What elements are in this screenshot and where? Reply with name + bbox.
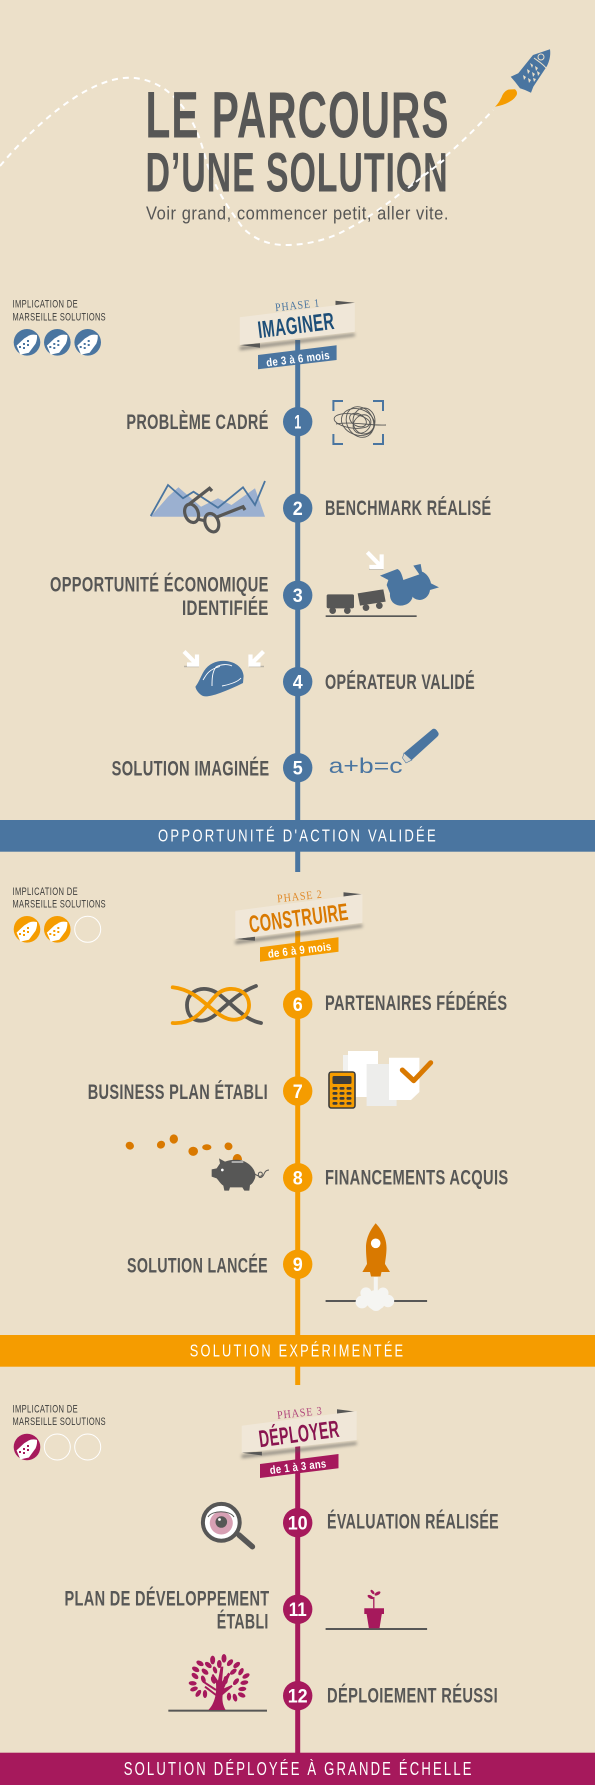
- step 12: DÉPLOIEMENT RÉUSSI: [327, 1683, 498, 1708]
- step 2: [151, 481, 491, 534]
- step 1: [126, 401, 386, 444]
- step 7: 7: [293, 1081, 303, 1103]
- icon: chart and glasses: [151, 481, 265, 534]
- banner 3: DÉPLOYER: [257, 1415, 341, 1453]
- milestone bar 1: OPPORTUNITÉ D'ACTION VALIDÉE: [158, 826, 438, 846]
- step 9: [127, 1223, 427, 1311]
- implication block 3: [12, 1403, 106, 1460]
- step 8: [124, 1134, 509, 1192]
- banner 2: CONSTRUIRE: [247, 899, 350, 939]
- title: [146, 77, 450, 204]
- icon: pen and formula: [329, 729, 439, 778]
- icon: header rocket: [495, 49, 550, 107]
- step 3: OPPORTUNITÉ ÉCONOMIQUE: [50, 572, 269, 597]
- banner 1: [240, 298, 355, 370]
- step 2: BENCHMARK RÉALISÉ: [325, 495, 492, 520]
- step 5: [112, 729, 439, 782]
- step 2: 2: [293, 498, 303, 520]
- step 5: 5: [293, 758, 303, 780]
- implication block 1: [12, 299, 106, 356]
- banner 3: [242, 1405, 357, 1478]
- step 12: [168, 1654, 498, 1712]
- step 11: [64, 1585, 427, 1634]
- icon: tangled scribble in frame: [333, 401, 386, 444]
- banner 3: PHASE 3: [277, 1405, 323, 1422]
- step 11: PLAN DE DÉVELOPPEMENT: [64, 1585, 270, 1610]
- step 3: 3: [293, 585, 303, 607]
- timeline 2: [295, 930, 300, 1385]
- banner 2: [235, 889, 362, 962]
- step 11: 11: [289, 1599, 307, 1621]
- milestone bar 3: [0, 1753, 595, 1785]
- dashed flight path: [0, 78, 493, 245]
- step 7: BUSINESS PLAN ÉTABLI: [88, 1079, 268, 1104]
- panel: phase 2 construire: [0, 886, 595, 1385]
- step 6: 6: [293, 994, 303, 1016]
- icon: piggy bank and coins: [124, 1134, 269, 1191]
- implication block 2: MARSEILLE SOLUTIONS: [12, 899, 106, 911]
- icon: pen and formula: a+b=c: [329, 755, 403, 778]
- step 3: IDENTIFIÉE: [182, 595, 269, 620]
- implication block 2: IMPLICATION DE: [12, 886, 78, 898]
- dashed path over title: [408, 160, 444, 188]
- implication block 1: IMPLICATION DE: [12, 299, 78, 311]
- panel: phase 3 deployer: [0, 1403, 595, 1785]
- step 9: 9: [293, 1254, 303, 1276]
- step 5: SOLUTION IMAGINÉE: [112, 755, 269, 780]
- subtitle: Voir grand, commencer petit, aller vite.: [146, 202, 449, 223]
- milestone bar 2: SOLUTION EXPÉRIMENTÉE: [190, 1341, 405, 1361]
- step 12: 12: [288, 1686, 308, 1708]
- step 4: 4: [293, 672, 303, 694]
- step 9: SOLUTION LANCÉE: [127, 1252, 268, 1277]
- icon: tree: [168, 1654, 267, 1712]
- implication block 2: [12, 886, 106, 943]
- banner 2: PHASE 2: [277, 889, 323, 905]
- step 1: 1: [294, 412, 301, 434]
- step 7: [88, 1051, 431, 1108]
- banner 3: de 1 à 3 ans: [269, 1458, 327, 1477]
- step 4: OPÉRATEUR VALIDÉ: [325, 669, 475, 694]
- step 10: ÉVALUATION RÉALISÉE: [327, 1509, 499, 1534]
- step 3: [50, 552, 439, 620]
- step 6: PARTENAIRES FÉDÉRÉS: [325, 990, 507, 1015]
- icon: seedling in pot: [326, 1589, 427, 1630]
- banner 1: IMAGINER: [256, 308, 336, 344]
- step 10: [203, 1504, 499, 1547]
- timeline 3: [295, 1445, 300, 1755]
- implication block 3: IMPLICATION DE: [12, 1403, 78, 1415]
- step 8: 8: [293, 1168, 303, 1190]
- step 10: 10: [288, 1512, 308, 1534]
- step 4: [184, 652, 475, 696]
- implication block 1: MARSEILLE SOLUTIONS: [12, 312, 106, 324]
- icon: magnifier with eye: [203, 1504, 252, 1547]
- icon: documents and calculator: [329, 1051, 431, 1108]
- milestone bar 1: [0, 820, 595, 852]
- icon: helmet with arrows: [184, 652, 264, 696]
- panel: phase 1 imaginer: [0, 298, 595, 872]
- step 6: [173, 986, 507, 1023]
- banner 1: PHASE 1: [275, 298, 321, 314]
- icon: knot: [173, 986, 261, 1023]
- step 1: PROBLÈME CADRÉ: [126, 409, 269, 434]
- milestone bar 3: SOLUTION DÉPLOYÉE À GRANDE ÉCHELLE: [124, 1759, 474, 1779]
- implication block 3: MARSEILLE SOLUTIONS: [12, 1416, 106, 1428]
- banner 2: de 6 à 9 mois: [267, 941, 332, 961]
- step 11: ÉTABLI: [217, 1609, 269, 1634]
- step 8: FINANCEMENTS ACQUIS: [325, 1164, 508, 1189]
- milestone bar 2: [0, 1335, 595, 1367]
- timeline 1: [295, 340, 300, 872]
- icon: train: [326, 552, 439, 617]
- icon: rocket launch: [326, 1223, 427, 1311]
- banner 1: de 3 à 6 mois: [266, 350, 331, 370]
